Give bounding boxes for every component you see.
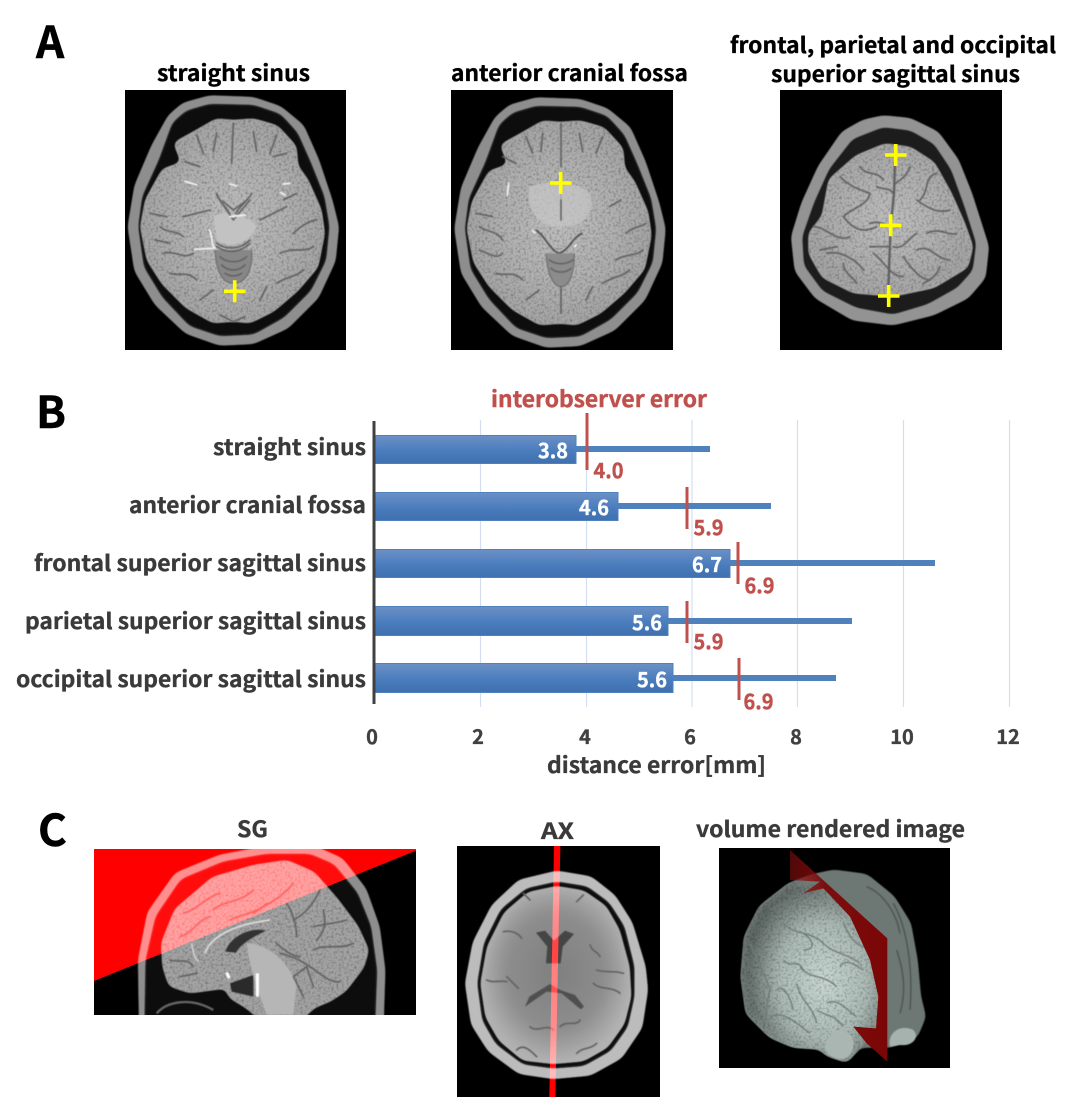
panel label B: B [36,377,66,441]
panel label A: A [35,7,65,71]
x axis tick labels: 6 [684,721,696,750]
heading: frontal, parietal and occipital superior sagittal sinus: superior sagittal sinus [771,57,1020,89]
interobserver error markers [586,413,740,700]
heading: frontal, parietal and occipital superior sagittal sinus [730,28,1056,89]
whiskers [570,446,935,681]
category labels: frontal superior sagittal sinus [34,546,366,578]
y axis line [372,421,376,704]
volume rendered head with red plane [719,848,950,1068]
MRI slice: anterior cranial fossa [451,90,673,350]
bar value labels: 3.8 [538,435,568,465]
category labels: straight sinus [213,430,366,462]
category labels [16,430,366,694]
heading: volume rendered image: volume rendered image [696,812,965,844]
interobserver error heading: interobserver error [491,382,707,414]
x axis tick labels: 12 [996,721,1020,750]
interobserver error values: 5.9 [694,512,724,542]
bar value labels: 4.6 [579,492,609,522]
bars [375,436,730,692]
category labels: occipital superior sagittal sinus [16,662,366,694]
vertical grid lines [480,420,1010,707]
axial MRI with red plane [457,846,660,1097]
x axis tick labels: 2 [472,721,484,750]
MRI slice: superior sagittal sinus [780,90,1002,350]
heading: SG: SG [237,812,268,844]
panel label C: C [38,795,67,859]
panel B: distance error bar chart [16,377,1020,780]
markers: frontal, parietal, occipital crosshairs [878,144,906,307]
category labels: parietal superior sagittal sinus [25,604,366,636]
x axis tick labels: 10 [890,721,914,750]
x axis tick labels: 0 [366,721,378,750]
panel A: localization sites [35,7,1056,350]
bar value labels: 5.6 [632,607,662,637]
category labels: anterior cranial fossa [129,488,366,520]
MRI slice: straight sinus [125,90,346,350]
x axis tick labels: 4 [579,721,591,750]
x axis tick labels: 8 [790,721,802,750]
interobserver error values: 5.9 [694,626,724,656]
bar value labels [538,435,722,694]
heading: AX: AX [540,814,574,846]
interobserver error values: 4.0 [594,455,624,485]
heading: frontal, parietal and occipital superior sagittal sinus: frontal, parietal and occipital [730,28,1056,60]
red axial line [549,846,560,1097]
interobserver error values [594,455,774,716]
panel C: oblique plane views [38,795,965,1097]
interobserver error values: 6.9 [744,570,774,600]
x axis title: distance error[mm] [547,748,766,780]
bar value labels: 6.7 [692,549,722,579]
marker: straight sinus crosshair [224,280,246,302]
bar value labels: 5.6 [637,664,667,694]
x axis tick labels [366,721,1020,750]
marker: anterior cranial fossa crosshair [550,172,572,194]
red oblique plane [94,849,416,981]
heading: anterior cranial fossa: anterior cranial fossa [451,56,688,88]
heading: straight sinus: straight sinus [157,56,310,88]
sagittal MRI with red plane [94,849,416,1015]
red plane [790,850,887,1062]
interobserver error values: 6.9 [744,686,774,716]
